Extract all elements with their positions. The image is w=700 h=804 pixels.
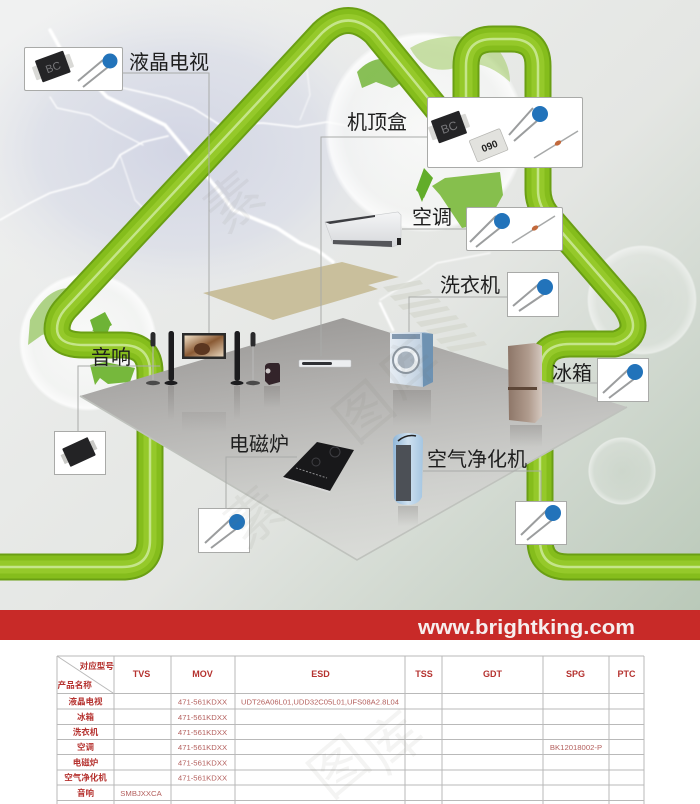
table values: BK12018002-P [550,743,602,752]
globe: left [19,273,157,411]
watermark: 库 [367,325,451,409]
floor reflections [168,386,542,526]
main floor [80,318,627,560]
table header [58,660,636,690]
appliance: set-top box [299,360,351,367]
stairs [383,280,487,352]
component box: refrigerator [598,358,648,402]
watermark: 素 [192,160,276,244]
table header: SPG [566,669,585,679]
appliance: TV [182,333,226,359]
table row names [64,696,107,798]
watermark [192,160,451,804]
label: set-top box: 机顶盒 [347,111,407,134]
white table area [0,640,700,804]
table header: 对应型号 [80,660,114,671]
table row names: 液晶电视 [68,696,103,706]
appliance: induction cooker [283,442,354,493]
table header: ESD [311,669,330,679]
label: refrigerator: 冰箱 [552,362,592,385]
label: air conditioner: 空调 [412,206,452,229]
watermark: 素 [212,475,296,559]
label: LCD TV: 液晶电视 [129,51,209,74]
table values: 471-561KDXX [178,728,227,737]
component box: induction cooker [198,508,250,552]
upper floor slab [203,262,399,320]
table header: TSS [415,669,433,679]
watermark: 库 [352,700,436,784]
table values: 471-561KDXX [178,743,227,752]
appliance: refrigerator [508,343,542,423]
table header: TVS [133,669,150,679]
component box: LCD TV [24,48,122,90]
component box: washing machine [508,272,558,316]
appliance: small speaker left [146,332,160,385]
red website band: www.brightking.com [417,616,635,639]
table row names: 洗衣机 [73,727,99,737]
red website band [0,610,700,640]
table values: SMBJXXCA [120,789,163,798]
lightning [0,30,490,330]
background [0,0,700,610]
component box: set-top box: 090 [480,139,500,155]
component box: air purifier [516,502,566,544]
table row names: 空调 [77,742,94,752]
label: air purifier: 空气净化机 [427,448,527,471]
table header: GDT [483,669,502,679]
appliance: subwoofer [265,363,280,385]
component box: audio [54,432,106,474]
table header: MOV [192,669,213,679]
table values: UDT26A06L01,UDD32C05L01,UFS08A2.8L04 [241,698,400,706]
appliance: air conditioner [325,212,401,247]
watermark: 图 [322,370,406,454]
table values: 471-561KDXX [178,698,227,706]
bubble: right [587,245,697,355]
bubble: small [588,437,656,505]
appliance: washing machine [390,332,433,387]
model table [57,656,644,804]
table header: 产品名称 [58,679,92,690]
component box: LCD TV: BC [44,60,63,76]
green pipe house outline [0,20,700,567]
globe: top right [325,32,525,232]
table row names: 空气净化机 [64,772,107,782]
label: washing machine: 洗衣机 [440,274,500,297]
table row names: 冰箱 [77,712,94,722]
leader lines [78,73,597,508]
appliance: air purifier [393,433,423,505]
appliance: small speaker right [246,332,260,385]
appliance: tall speaker left [164,331,178,385]
label: induction cooker: 电磁炉 [229,433,289,456]
component box: set-top box: BC [439,118,460,137]
table header: PTC [618,669,636,679]
component box: set-top box [426,98,582,168]
label: audio: 音响 [91,346,131,369]
table values: 471-561KDXX [178,758,227,768]
table values [120,698,602,798]
component box: air conditioner [466,208,562,250]
appliance: tall speaker right [230,331,244,385]
table values: 471-561KDXX [178,713,227,722]
table values: 471-561KDXX [178,774,227,782]
table row names: 音响 [77,788,94,798]
table row names: 电磁炉 [73,758,99,768]
